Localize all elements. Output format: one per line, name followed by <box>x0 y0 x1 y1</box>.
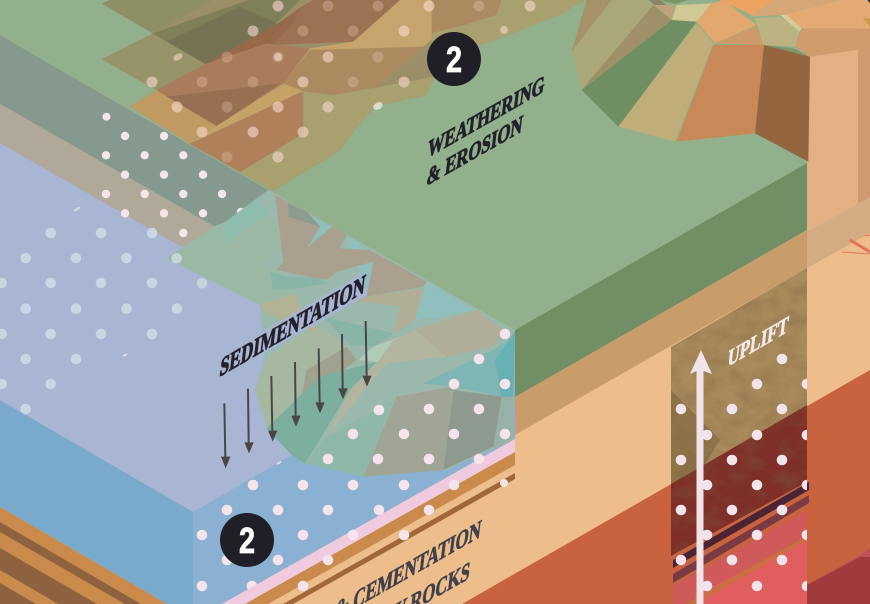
sediment: submerged low-poly mound <box>167 190 515 477</box>
thin orange stripe <box>685 536 807 604</box>
rock layer: dark red corner <box>807 548 870 604</box>
dots: brighter pattern on mountain highlights <box>146 0 536 162</box>
water: left side face <box>0 400 193 604</box>
land: dark green cliff face <box>515 163 807 397</box>
mauve stripe <box>673 495 809 583</box>
band: orange layer <box>245 452 515 604</box>
band: brown thin layer <box>283 473 515 604</box>
strata: bottom left sediment stripes <box>0 507 167 604</box>
badge: step 2 on land: 2 <box>446 39 462 80</box>
water: lavender top surface <box>0 143 515 512</box>
dark red section <box>671 405 807 556</box>
label: sedimentation <box>217 268 367 383</box>
band: grey-green shore band <box>0 35 272 228</box>
label: sedimentation: SEDIMENTATION <box>218 268 367 383</box>
mountain: right end of left range <box>432 0 585 77</box>
marks: red fault lines <box>842 235 870 254</box>
mountain: right low-poly peak <box>572 0 870 162</box>
arrows: sediment falling <box>221 321 372 468</box>
tan rock section <box>671 268 807 484</box>
band: grey-tan shore band <box>0 104 217 247</box>
mountain: left low-poly range <box>102 0 435 191</box>
rock layer: orange lower stratum <box>462 370 870 604</box>
land: tan layer below cliff <box>515 230 807 435</box>
badge: step 2 on land <box>427 32 481 86</box>
water: right side face <box>193 326 515 604</box>
dots: pattern over lower sediment and water <box>73 206 510 591</box>
label: weathering and erosion: & EROSION <box>425 111 524 192</box>
plum stripe <box>673 482 809 568</box>
pink-red lower layer <box>673 510 807 604</box>
badge: step 2 on water <box>220 513 274 567</box>
land: green top surface <box>0 0 870 330</box>
arrow: uplift <box>690 350 712 604</box>
badge: partial marker at top right corner <box>863 0 870 12</box>
rock column: peach upper right <box>807 40 870 268</box>
orange gap <box>671 482 807 604</box>
bright red base <box>695 539 807 604</box>
dots: shore band pattern <box>102 113 245 237</box>
badge: step 2 on water: 2 <box>239 520 255 561</box>
dots: faint pattern on lavender water <box>0 228 182 414</box>
column: uplift exposed strata <box>671 268 809 604</box>
grain texture <box>671 268 807 556</box>
label: weathering and erosion: WEATHERING <box>426 71 546 164</box>
dots: muted pattern in mountain shadow <box>196 0 484 162</box>
dots: uplift column pattern <box>676 354 812 591</box>
label: uplift: UPLIFT <box>726 312 790 373</box>
band: pink sand layer <box>222 439 515 604</box>
dark patch in tan rock <box>671 390 720 484</box>
label: compaction and cementation <box>333 514 483 604</box>
dots: pattern over pink and orange bands <box>298 454 508 591</box>
